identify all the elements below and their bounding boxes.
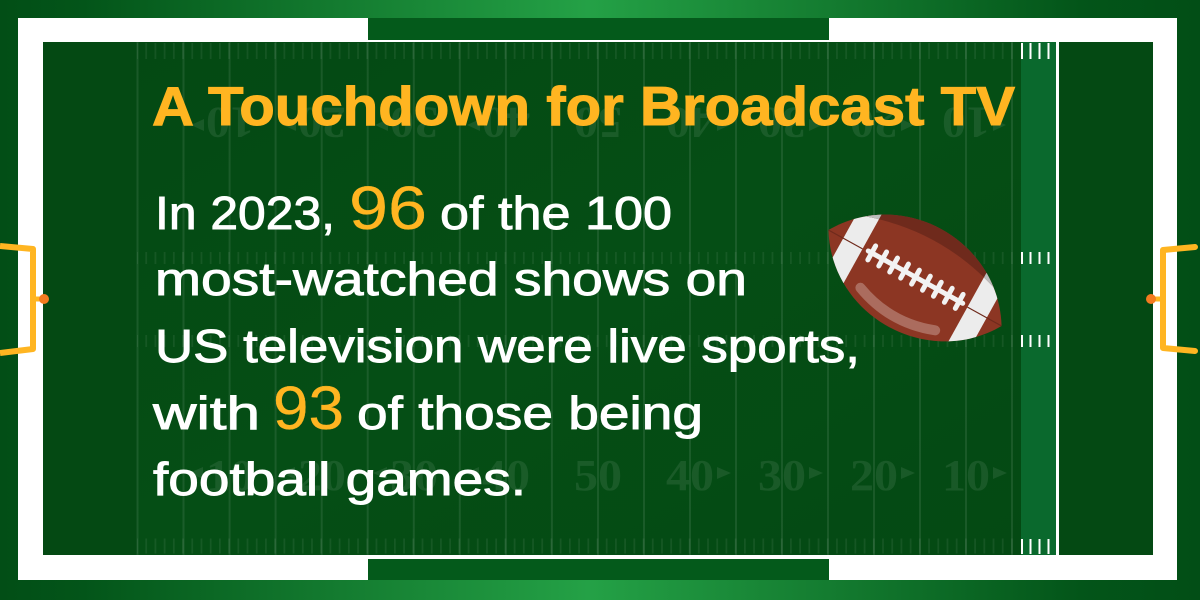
body text: 93 — [273, 374, 344, 442]
yard numbers top row (inverted): 40 — [482, 98, 530, 147]
yard numbers bottom row: 10 — [942, 451, 990, 500]
right goal post — [1146, 247, 1195, 351]
yard numbers top row (inverted): 30 — [758, 98, 806, 147]
yard numbers bottom row: 20 — [850, 451, 898, 500]
yard numbers bottom row: 30 — [758, 451, 806, 500]
right end zone — [1059, 42, 1153, 555]
yard numbers top row (inverted): 10 — [206, 98, 254, 147]
icon: football — [828, 214, 1002, 342]
yard numbers top row (inverted): 20 — [298, 98, 346, 147]
yard numbers top row (inverted): 20 — [850, 98, 898, 147]
bottom sideline bar — [368, 559, 829, 580]
yard numbers top row (inverted): 40 — [666, 98, 714, 147]
yard numbers bottom row: 20 — [298, 451, 346, 500]
left end zone — [43, 42, 137, 555]
body text — [152, 174, 860, 505]
body text: with — [152, 387, 260, 439]
body text: football games. — [153, 453, 526, 505]
playing field — [137, 42, 1059, 555]
yard numbers top row (inverted): 50 — [574, 98, 622, 147]
body text: US television were live sports, — [155, 320, 860, 372]
body text: of those being — [357, 387, 703, 439]
body text: of the 100 — [440, 187, 672, 239]
left goal post — [0, 246, 49, 353]
yard numbers bottom row: 10 — [206, 451, 254, 500]
top sideline bar — [368, 18, 829, 40]
yard numbers top row (inverted) — [191, 98, 1006, 147]
title: A Touchdown for Broadcast TV — [152, 75, 1015, 137]
yard numbers top row (inverted): 30 — [390, 98, 438, 147]
yard numbers bottom row: 40 — [482, 451, 530, 500]
body text: In 2023, — [155, 187, 335, 239]
yard numbers top row (inverted): 10 — [942, 98, 990, 147]
body text: most-watched shows on — [155, 253, 747, 305]
yard numbers bottom row: 50 — [574, 451, 622, 500]
yard numbers bottom row: 40 — [666, 451, 714, 500]
body text: 96 — [349, 174, 427, 242]
yard numbers bottom row: 30 — [390, 451, 438, 500]
yard numbers bottom row — [189, 451, 1007, 500]
